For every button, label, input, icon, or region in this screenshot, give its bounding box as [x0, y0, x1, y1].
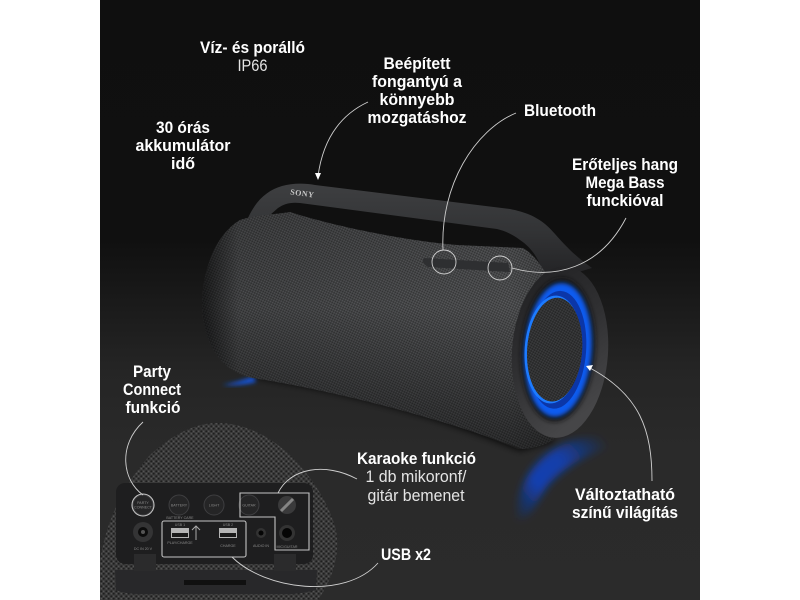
callout: Party Connect: funkció	[126, 399, 180, 417]
callout: fogantyú: mozgatáshoz	[368, 109, 466, 127]
callout: Party Connect: Connect	[123, 381, 181, 399]
mesh dome	[100, 423, 337, 600]
arrow: handle	[315, 102, 368, 180]
button labels: GUITAR	[242, 504, 256, 508]
button labels: BATTERY	[171, 504, 188, 508]
callout: Karaoke	[357, 450, 476, 505]
blue light reflection on floor	[517, 437, 608, 518]
inner fabric disc	[527, 298, 582, 402]
ports	[133, 522, 295, 542]
callout: akkumulátor	[136, 119, 231, 173]
callout: akkumulátor: akkumulátor	[136, 137, 231, 155]
button labels: USB 2	[223, 523, 233, 527]
callout: akkumulátor: 30 órás	[156, 119, 210, 137]
blue light ring	[520, 281, 596, 419]
lower handle	[115, 570, 317, 594]
background panel	[100, 0, 700, 600]
speaker end ring	[512, 272, 608, 438]
line: Mega Bass	[488, 218, 626, 280]
speaker	[202, 184, 614, 450]
callout: Víz- és porálló: Víz- és porálló	[200, 39, 305, 57]
callout: Víz- és porálló: IP66	[238, 57, 268, 75]
blue glow under the speaker	[222, 376, 256, 385]
button labels: CHARGE	[220, 544, 236, 548]
line: karaoke	[278, 469, 357, 493]
rear control plate	[116, 483, 313, 564]
button labels: PLAY/CHARGE	[167, 541, 193, 545]
callout: USB: USB x2	[381, 546, 431, 564]
callout: fogantyú: fongantyú a	[372, 73, 463, 91]
callout: világítás: Változtatható	[575, 486, 675, 504]
control strip	[423, 258, 510, 272]
callout: Karaoke: gitár bemenet	[368, 487, 465, 505]
callout: Mega Bass: Erőteljes hang	[572, 156, 678, 174]
line: Bluetooth	[432, 113, 516, 274]
carrying handle	[248, 184, 592, 272]
button labels: USB 1	[175, 523, 185, 527]
button labels: PARTY	[137, 501, 149, 505]
button labels: BATTERY CARE	[166, 516, 194, 520]
callout: világítás	[572, 486, 678, 522]
buttons	[133, 495, 259, 515]
button labels: DC IN 20 V	[134, 547, 153, 551]
SONY logo: SONY	[290, 187, 315, 200]
callout: akkumulátor: idő	[171, 155, 195, 173]
floor shadow	[250, 378, 554, 452]
fabric speaker body	[202, 212, 565, 449]
button labels	[134, 501, 298, 551]
callout: Mega Bass: funckióval	[586, 192, 664, 210]
button labels: AUDIO IN	[253, 544, 269, 548]
callout: Karaoke: 1 db mikoronf/	[366, 468, 467, 486]
callout: fogantyú: Beépített	[384, 55, 451, 73]
highlight: USB ports	[162, 521, 246, 557]
button labels: CONNECT	[134, 506, 153, 510]
volume knob	[278, 496, 296, 514]
button labels: LIGHT	[209, 504, 220, 508]
highlight: karaoke inputs	[240, 493, 309, 550]
rear panel inset	[100, 423, 337, 600]
line: party connect	[126, 422, 143, 495]
callout: világítás: színű világítás	[572, 504, 678, 522]
callout: Bluetooth: Bluetooth	[524, 102, 596, 120]
callout: fogantyú	[368, 55, 466, 127]
arrow: lighting	[586, 365, 652, 481]
line: USB	[232, 557, 378, 587]
highlight: party connect button	[132, 494, 154, 516]
callout: Karaoke: Karaoke funkció	[357, 450, 476, 468]
callout: Party Connect	[123, 363, 181, 417]
callout: Víz- és porálló	[200, 39, 305, 75]
callout: fogantyú: könnyebb	[380, 91, 454, 109]
callout: Party Connect: Party	[133, 363, 172, 381]
callout: Mega Bass: Mega Bass	[586, 174, 664, 192]
button labels: MIC/GUITAR	[277, 545, 298, 549]
callout: Mega Bass	[572, 156, 678, 210]
